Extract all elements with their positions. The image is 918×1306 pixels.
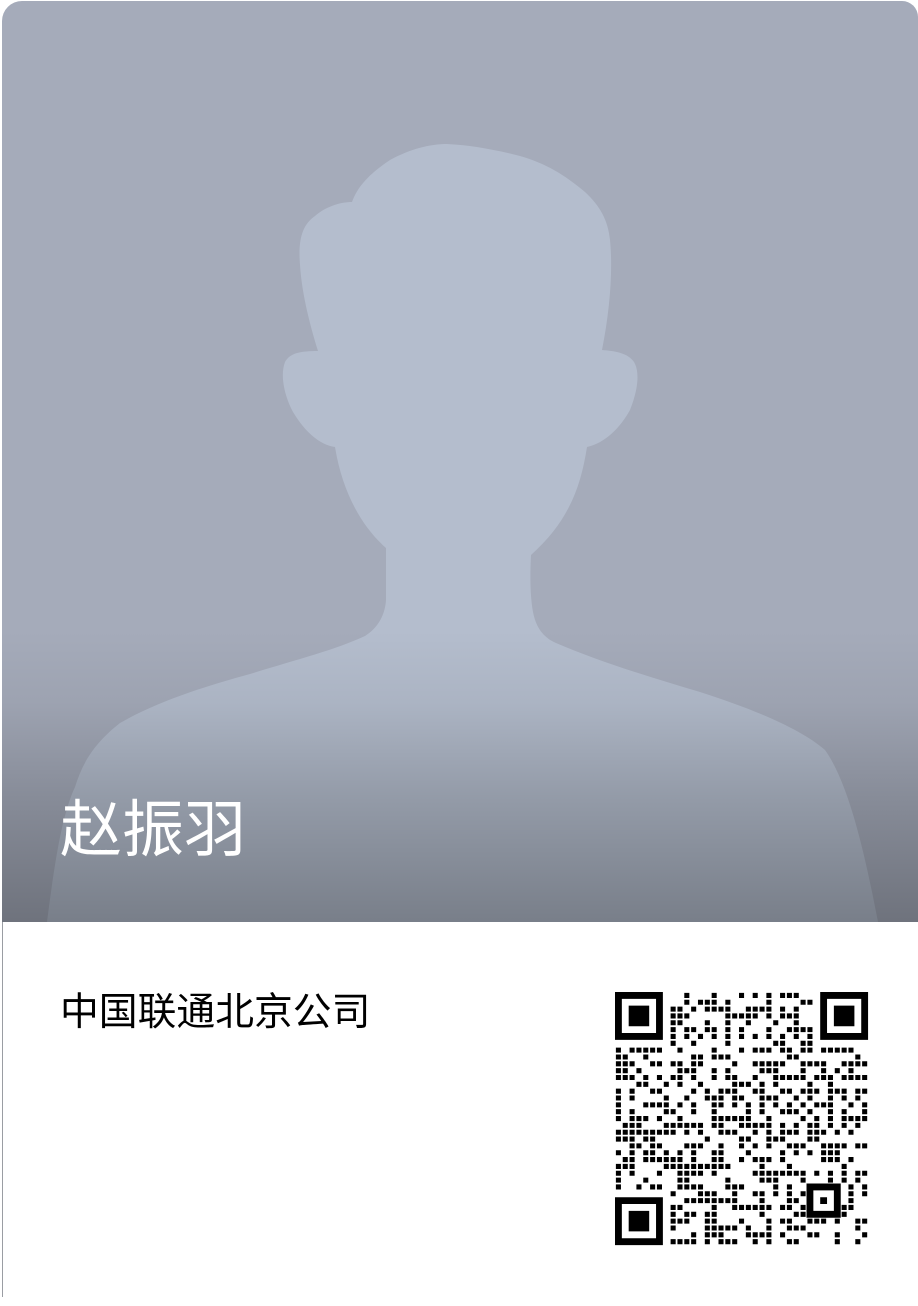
panel: portrait placeholder xyxy=(2,1,918,922)
name heading: 赵振羽 xyxy=(60,796,246,865)
icon: person silhouette xyxy=(47,144,878,922)
bottom shade gradient xyxy=(0,630,918,922)
card left edge line xyxy=(2,900,3,1297)
company text: 中国联通北京公司 xyxy=(60,991,370,1034)
